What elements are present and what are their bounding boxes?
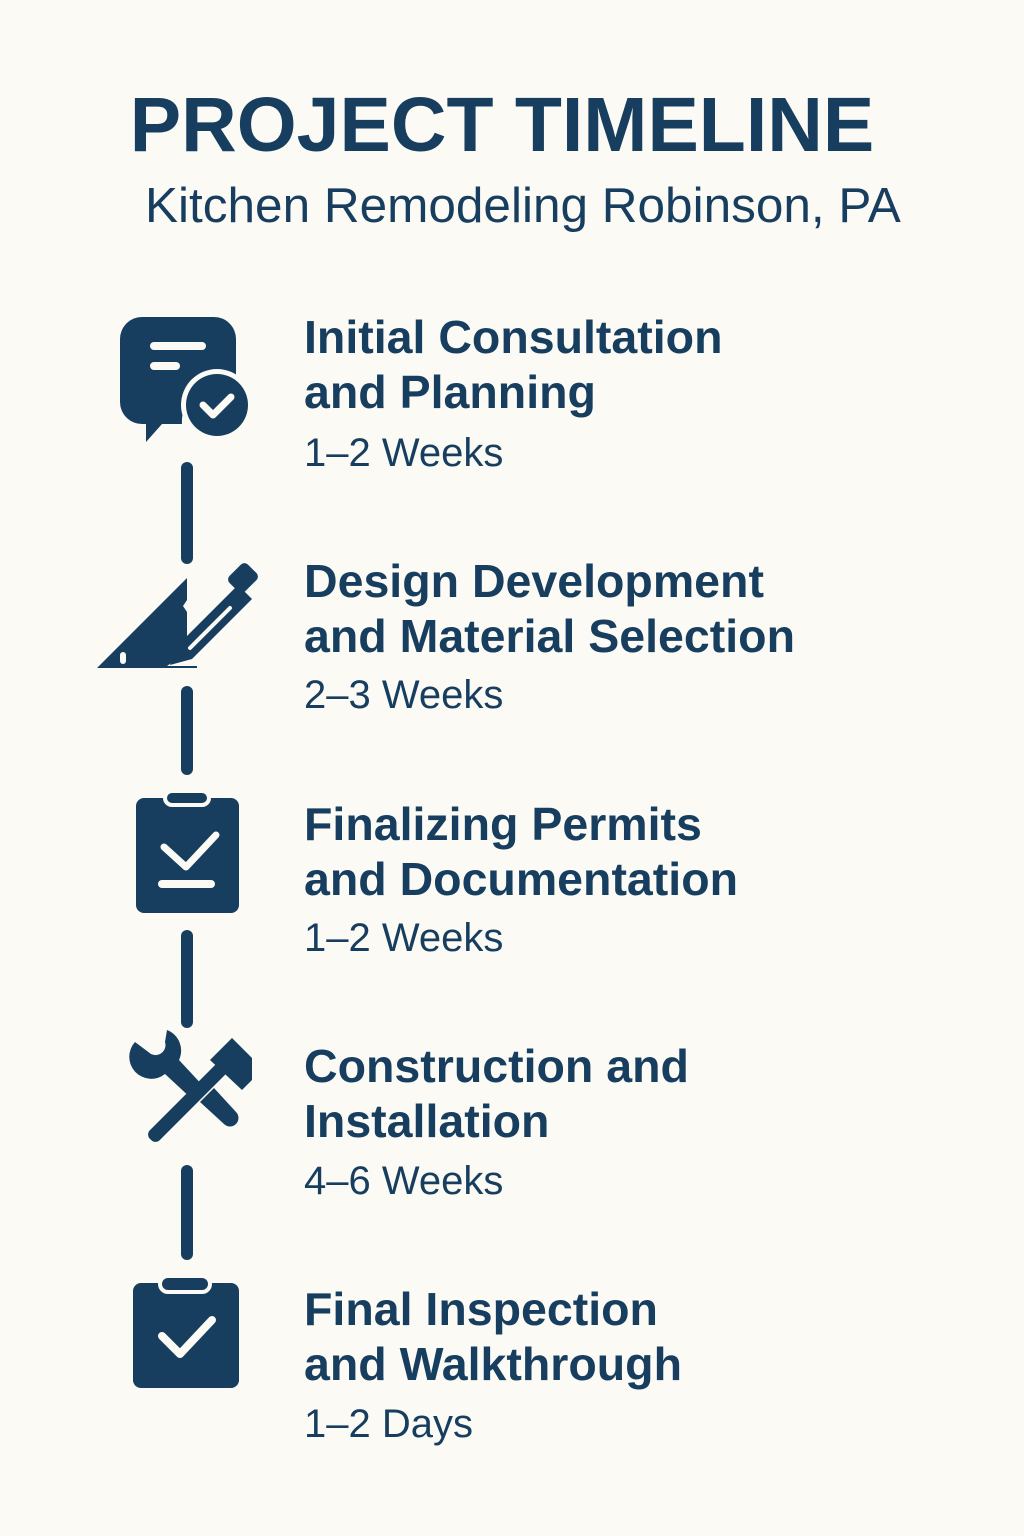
text: Finalizing Permits [304, 798, 702, 850]
text: and Planning [304, 366, 596, 418]
text: and Material Selection [304, 610, 795, 662]
connector 1 [181, 462, 193, 564]
title: PROJECT TIMELINE [130, 82, 874, 168]
step 3 text [304, 798, 738, 960]
step 5 text [304, 1283, 682, 1446]
icon: wrench and hammer [129, 1030, 252, 1142]
text: 1–2 Days [304, 1402, 473, 1446]
connector 2 [181, 686, 193, 775]
step 1 text [304, 311, 722, 475]
text: Installation [304, 1095, 549, 1147]
text: and Documentation [304, 853, 738, 905]
icon: triangle ruler and pencil [97, 563, 258, 668]
text: 4–6 Weeks [304, 1159, 503, 1203]
text: Final Inspection [304, 1283, 658, 1335]
step 2 text [304, 555, 795, 717]
text: Initial Consultation [304, 311, 722, 363]
text: 2–3 Weeks [304, 673, 503, 717]
text: Construction and [304, 1040, 689, 1092]
icon: chat bubble with check [120, 317, 248, 442]
icon: clipboard check [133, 1278, 239, 1388]
subtitle: Kitchen Remodeling Robinson, PA [145, 178, 901, 233]
icon: clipboard download check [136, 793, 239, 913]
step 4 text [304, 1040, 689, 1203]
text: Design Development [304, 555, 764, 607]
text: and Walkthrough [304, 1338, 682, 1390]
connector 4 [181, 1165, 193, 1260]
connector 3 [181, 930, 193, 1028]
text: 1–2 Weeks [304, 916, 503, 960]
text: 1–2 Weeks [304, 431, 503, 475]
